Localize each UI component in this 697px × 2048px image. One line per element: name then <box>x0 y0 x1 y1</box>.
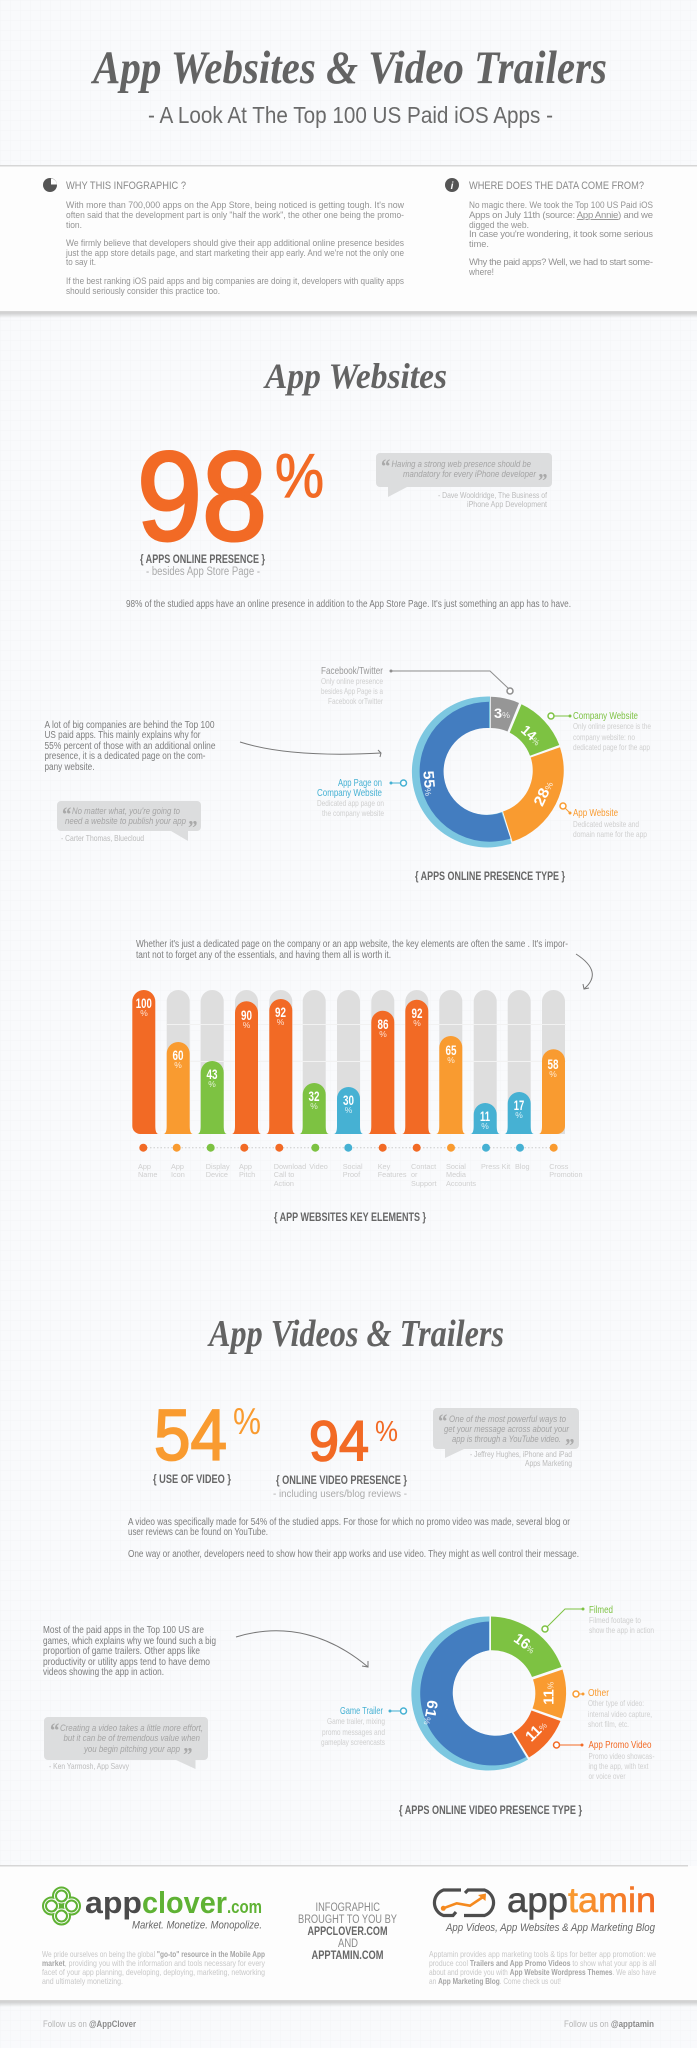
donut chart: online presence type: 55 % <box>419 770 438 797</box>
bar chart: app websites key elements <box>132 990 566 1134</box>
logo: appclover: clover <box>142 1885 227 1920</box>
bar axis labels: Pitch <box>239 1170 255 1179</box>
bar: Key Features 86%: % <box>379 1029 387 1039</box>
bar: Contact or Support 92% <box>402 1000 432 1134</box>
big stat: 98%: 98 <box>137 426 267 567</box>
quote: Ken Yarmosh: ” <box>182 1744 192 1766</box>
text block: games: games, which explains why we found such a big <box>43 1636 216 1647</box>
text block: why this infographic: With more than 700,000 apps on the App Store, being noticed is getting tough. It's now <box>66 200 404 211</box>
text block: games: Most of the paid apps in the Top 100 US are <box>43 1625 204 1636</box>
text block: video summary <box>128 1517 579 1560</box>
bar: Press Kit 11% <box>470 1103 500 1134</box>
callout: Filmed: Filmed <box>589 1604 613 1616</box>
logo: apptamin: tamin <box>568 1881 656 1920</box>
logo: apptamin: App Videos, App Websites & App Marketing Blog <box>445 1922 656 1934</box>
follow: AppClover: Follow us on @AppClover <box>43 2019 136 2030</box>
arrow: to bars <box>576 954 592 989</box>
callout: Game Trailer: promo messages and <box>322 1727 385 1737</box>
big stat: 54%: % <box>233 1401 261 1442</box>
callout: Other: short film, etc. <box>588 1719 629 1729</box>
icon: info: i <box>451 181 454 192</box>
quote: Jeffrey Hughes: “ <box>437 1411 447 1433</box>
bar axis labels: App <box>138 1162 151 1171</box>
bar: App Pitch 90%: % <box>243 1020 251 1030</box>
callout: App Promo Video <box>554 1739 655 1781</box>
big stat: 54%: 54 <box>154 1396 227 1476</box>
bar axis labels: Social <box>343 1162 363 1171</box>
bar axis labels: Download <box>274 1162 306 1171</box>
text block: appclover description: market, providing you with the information and tools necessary for every <box>42 1958 266 1968</box>
text block: games <box>43 1625 216 1678</box>
caption: online video presence: { ONLINE VIDEO PRESENCE } <box>276 1475 407 1487</box>
callout: App Promo Video: App Promo Video <box>588 1739 652 1751</box>
bar: Display Device 43%: % <box>208 1079 216 1089</box>
donut chart: video presence type <box>411 1616 566 1770</box>
text block: key elements: Whether it's just a dedicated page on the company or an app website, the key elements are often the same . It's impor- <box>136 939 568 950</box>
quote: Ken Yarmosh: but it can be of tremendous value when <box>64 1733 200 1744</box>
follow: apptamin: Follow us on @apptamin <box>564 2019 654 2030</box>
bar: Blog 17%: 17 <box>514 1098 524 1113</box>
quote: Ken Yarmosh: Creating a video takes a little more effort, <box>60 1723 203 1734</box>
quote: Jeffrey Hughes: app is through a YouTube video. <box>452 1434 561 1445</box>
text block: data source: Apps on July 11th (source: App Annie) and we <box>469 210 653 221</box>
text block: games: productivity or utility apps tend to have demo <box>43 1657 210 1668</box>
text block: big companies: 55% percent of those with an additional online <box>44 741 216 752</box>
quote: Jeffrey Hughes <box>433 1408 579 1468</box>
bar axis labels: Press Kit <box>481 1162 510 1171</box>
bar axis labels: Accounts <box>446 1179 476 1188</box>
callout: Company Website: Company Website <box>573 710 638 722</box>
text block: data source <box>468 200 653 278</box>
heading: why this infographic: WHY THIS INFOGRAPHIC ? <box>66 180 186 192</box>
bar: Display Device 43% <box>197 1061 227 1134</box>
panel: footer <box>0 1865 697 2007</box>
text block: appclover description <box>42 1949 266 1986</box>
caption: video presence type: { APPS ONLINE VIDEO PRESENCE TYPE } <box>399 1805 582 1817</box>
bar: Cross Promotion 58% <box>538 1049 565 1134</box>
bar axis labels: Device <box>206 1170 228 1179</box>
bar: Press Kit 11%: 11 <box>480 1109 490 1124</box>
callout: Facebook/Twitter: Facebook orTwitter <box>328 696 383 706</box>
bar: Cross Promotion 58%: 58 <box>548 1057 559 1072</box>
bar axis labels: Display <box>206 1162 230 1171</box>
bar axis labels: Promotion <box>549 1170 583 1179</box>
callout: App Promo Video: ing the app, with text <box>588 1761 649 1771</box>
bar: Video 32%: 32 <box>308 1089 320 1104</box>
bar: Download Call to Action 92%: 92 <box>275 1005 286 1020</box>
text block: video summary: One way or another, developers need to show how their app works and use video. They might as well control their message. <box>128 1549 579 1560</box>
text block: data source: time. <box>469 239 489 250</box>
text block: why this infographic: often said that the development part is only "half the work", the other one being the promo- <box>66 210 404 221</box>
big stat: 94%: % <box>375 1416 398 1448</box>
callout: App Website <box>560 803 647 839</box>
callout: Filmed <box>542 1604 654 1635</box>
callout: Company Website <box>548 710 651 752</box>
text block: games: proportion of game trailers. Other apps like <box>43 1646 200 1657</box>
bar: Display Device 43%: 43 <box>206 1067 218 1082</box>
bar: App Pitch 90% <box>232 1001 262 1134</box>
bar: Blog 17% <box>504 1092 534 1134</box>
bar axis labels: or <box>411 1170 418 1179</box>
callout: Game Trailer: Game Trailer <box>340 1705 383 1717</box>
quote: Carter Thomas: - Carter Thomas, Bluecloud <box>61 833 144 843</box>
text block: why this infographic: We firmly believe that developers should give their app additional online presence besides <box>66 238 404 249</box>
bar: Download Call to Action 92%: % <box>277 1017 285 1027</box>
bar: App Icon 60% <box>163 1042 193 1134</box>
quote: Carter Thomas <box>57 801 201 843</box>
donut chart: video presence type: 11% <box>540 1681 557 1705</box>
arrow: to donut <box>240 742 381 757</box>
quote: Carter Thomas: No matter what, you're going to <box>72 806 180 817</box>
text block: why this infographic: to say it. <box>66 257 96 268</box>
callout: Filmed: Filmed footage to <box>589 1615 641 1625</box>
callout: Company Website: dedicated page for the app <box>573 742 650 752</box>
bar: App Icon 60%: % <box>174 1060 182 1070</box>
text block: appclover description: and ultimately monetizing. <box>42 1976 123 1986</box>
donut chart: video presence type: 16% <box>510 1630 539 1658</box>
bar axis labels: Icon <box>171 1170 185 1179</box>
caption: presence type: { APPS ONLINE PRESENCE TYPE } <box>415 871 565 883</box>
quote: Ken Yarmosh: “ <box>49 1720 59 1742</box>
bar axis labels: Social <box>446 1162 466 1171</box>
panel: intro <box>0 165 697 318</box>
callout: Other: Other type of video: <box>588 1698 644 1708</box>
callout: Filmed: show the app in action <box>589 1625 654 1635</box>
callout: Other <box>573 1687 652 1729</box>
quote: Carter Thomas: “ <box>61 804 71 826</box>
text block: why this infographic: tion. <box>66 220 82 231</box>
quote: Jeffrey Hughes: ” <box>564 1435 574 1457</box>
bar axis dots <box>139 1144 558 1152</box>
callout: App Website: App Website <box>573 807 618 819</box>
text block: appclover description: facet of your app planning, developing, deploying, marketing, networking <box>42 1967 265 1977</box>
callout: App Page on Company Website: Dedicated app page on <box>317 798 384 808</box>
callout: Company Website: company website: no <box>573 732 635 742</box>
bar axis labels: Video <box>309 1162 328 1171</box>
text block: big companies <box>44 720 216 773</box>
text block: brought to you by: INFOGRAPHIC <box>316 1902 380 1914</box>
callout: Other: internal video capture, <box>588 1709 652 1719</box>
text block: big companies: presence, it is a dedicated page on the com- <box>44 751 206 762</box>
bar axis labels: Key <box>378 1162 391 1171</box>
logo: appclover <box>44 1885 262 1932</box>
quote: Jeffrey Hughes: get your message across about your <box>444 1424 570 1435</box>
text block: data source: Why the paid apps? Well, we had to start some- <box>469 257 653 268</box>
donut chart: online presence type: 28% <box>531 778 557 809</box>
big stat: 98%: % <box>275 442 324 511</box>
bar: App Name 100%: % <box>140 1008 148 1018</box>
icon: info <box>445 178 459 192</box>
bar axis labels: Contact <box>411 1162 436 1171</box>
quote: Carter Thomas: ” <box>187 817 197 839</box>
callout: Facebook/Twitter: Facebook/Twitter <box>321 665 383 677</box>
text block: data source: In case you're wondering, it took some serious <box>469 229 653 240</box>
bar: Social Media Accounts 65%: 65 <box>446 1043 457 1058</box>
big stat: 94%: 94 <box>309 1410 369 1474</box>
sub caption: - besides App Store Page - <box>146 566 260 578</box>
text block: brought to you by: APPTAMIN.COM <box>312 1950 384 1962</box>
bar: App Pitch 90%: 90 <box>241 1008 252 1023</box>
logo: apptamin: app <box>507 1881 568 1920</box>
bar: Video 32%: % <box>310 1101 318 1111</box>
callout: App Promo Video: Promo video showcas- <box>588 1751 655 1761</box>
bar: Download Call to Action 92% <box>266 999 296 1134</box>
text block: why this infographic: If the best ranking iOS paid apps and big companies are doing it, developers with quality apps <box>66 276 404 287</box>
callout: App Page on Company Website: the company website <box>322 808 384 818</box>
bar axis labels <box>138 1162 583 1188</box>
text block: apptamin description: an App Marketing Blog. Come check us out! <box>429 1976 561 1986</box>
callout: Game Trailer: gameplay screencasts <box>321 1737 385 1747</box>
title: App Websites & Video Trailers <box>90 42 607 94</box>
text block: video summary: A video was specifically made for 54% of the studied apps. For those for which no promo video was made, several blog or <box>128 1517 571 1528</box>
text block: apptamin description: about and provide you with App Website Wordpress Themes. We also have <box>429 1967 656 1977</box>
callout: Facebook/Twitter: Only online presence <box>321 676 383 686</box>
bar: Blog 17%: % <box>515 1110 523 1120</box>
bar: Social Media Accounts 65% <box>436 1036 466 1134</box>
bar axis labels: Blog <box>515 1162 530 1171</box>
callout: Facebook/Twitter: besides App Page is a <box>321 686 383 696</box>
text block: video summary: user reviews can be found on YouTube. <box>128 1527 268 1538</box>
bar: Social Proof 30% <box>334 1087 364 1134</box>
quote: Dave Wooldridge: ” <box>537 470 547 492</box>
quote: Dave Wooldridge: Having a strong web presence should be <box>392 459 531 470</box>
quote: Jeffrey Hughes: One of the most powerful ways to <box>449 1414 566 1425</box>
bar axis labels: Name <box>138 1170 157 1179</box>
bar tracks <box>167 990 565 1134</box>
bar: Social Proof 30%: 30 <box>343 1093 354 1108</box>
heading: app videos and trailers: App Videos & Trailers <box>207 1313 504 1355</box>
icon: clover knot <box>44 1889 78 1923</box>
text block: big companies: US paid apps. This mainly explains why for <box>44 730 201 741</box>
quote: Ken Yarmosh: you begin pitching your app <box>83 1744 180 1755</box>
quote: Ken Yarmosh <box>44 1717 208 1771</box>
text block: why this infographic <box>65 200 404 297</box>
donut chart: online presence type: 3% <box>494 705 510 721</box>
text block: key elements: tant not to forget any of the essentials, and having them all is worth it. <box>136 950 391 961</box>
bar axis labels: Support <box>411 1179 437 1188</box>
quote: Dave Wooldridge: iPhone App Development <box>467 499 548 509</box>
caption: use of video: { USE OF VIDEO } <box>153 1474 231 1486</box>
bar: App Name 100% <box>132 990 159 1134</box>
text block: apptamin description: produce cool Trailers and App Promo Videos to show what your app is all <box>429 1958 656 1968</box>
callout: App Promo Video: or voice over <box>588 1771 626 1781</box>
callout: App Website: Dedicated website and <box>573 819 639 829</box>
text block: big companies: pany website. <box>44 762 94 773</box>
text block: brought to you by <box>298 1902 397 1962</box>
bar: Press Kit 11%: % <box>481 1121 489 1131</box>
text block: appclover description: We pride ourselves on being the global "go-to" resource in the Mobile App <box>42 1949 265 1959</box>
bar: Contact or Support 92%: 92 <box>412 1006 422 1021</box>
heading: app websites: App Websites <box>263 356 447 396</box>
text block: big companies: A lot of big companies are behind the Top 100 <box>44 720 215 731</box>
bar: App Icon 60%: 60 <box>172 1048 184 1063</box>
bar: Video 32% <box>299 1083 329 1134</box>
quote: Jeffrey Hughes: - Jeffrey Hughes, iPhone and iPad <box>470 1449 572 1459</box>
bar: Key Features 86%: 86 <box>378 1017 389 1032</box>
bar: Key Features 86% <box>368 1011 398 1134</box>
quote: Dave Wooldridge: mandatory for every iPhone developer <box>403 469 537 480</box>
bar axis labels: Proof <box>343 1170 361 1179</box>
callout: Other: Other <box>588 1687 609 1699</box>
text block: brought to you by: AND <box>338 1938 358 1950</box>
icon: film chart <box>434 1890 494 1916</box>
text block: data source: where! <box>468 267 494 278</box>
quote: Jeffrey Hughes: Apps Marketing <box>525 1458 572 1468</box>
arrow: to video donut <box>236 1631 368 1667</box>
text block: why this infographic: should seriously consider this practice too. <box>66 286 220 297</box>
callout: Game Trailer: Game trailer, mixing <box>327 1716 385 1726</box>
caption: apps online presence: { APPS ONLINE PRESENCE } <box>140 554 265 566</box>
bar: Cross Promotion 58%: % <box>549 1069 557 1079</box>
donut chart: online presence type: 14% <box>518 722 546 749</box>
callout: Company Website: Only online presence is the <box>573 721 651 731</box>
bar: Contact or Support 92%: % <box>413 1018 421 1028</box>
text block: 98% summary: 98% of the studied apps have an online presence in addition to the App Store Page. It's just something an app has to have. <box>126 599 571 610</box>
text block: key elements <box>136 939 568 961</box>
heading: data source: WHERE DOES THE DATA COME FROM? <box>469 180 644 192</box>
logo: appclover: app <box>85 1885 142 1920</box>
bar axis labels: App <box>171 1162 184 1171</box>
callout: Game Trailer <box>321 1705 406 1747</box>
callout: App Page on Company Website <box>317 777 406 818</box>
text block: brought to you by: BROUGHT TO YOU BY <box>298 1914 397 1926</box>
text block: games: videos showing the app in action. <box>43 1667 164 1678</box>
text block: apptamin description <box>429 1949 656 1986</box>
text block: data source: digged the web. <box>469 220 529 231</box>
bar axis labels: Features <box>378 1170 407 1179</box>
bar axis labels: Media <box>446 1170 467 1179</box>
quote: Dave Wooldridge <box>376 453 552 509</box>
bar: App Name 100%: 100 <box>136 996 152 1011</box>
bar axis labels: Call to <box>274 1170 294 1179</box>
logo: apptamin <box>434 1881 656 1934</box>
icon: pie chart <box>43 178 57 192</box>
logo: appclover: Market. Monetize. Monopolize. <box>132 1920 262 1932</box>
caption: key elements: { APP WEBSITES KEY ELEMENTS } <box>274 1212 426 1224</box>
bar: Social Media Accounts 65%: % <box>447 1055 455 1065</box>
sub caption: - including users/blog reviews - <box>273 1488 407 1500</box>
quote: Dave Wooldridge: “ <box>380 456 390 478</box>
text block: why this infographic: just the app store details page, and start marketing their app early. And we're not the only one <box>65 248 404 259</box>
text block: brought to you by: APPCLOVER.COM <box>308 1926 388 1938</box>
quote: Dave Wooldridge: - Dave Wooldridge, The Business of <box>438 490 548 500</box>
bar axis labels: Action <box>274 1179 294 1188</box>
logo: appclover: .com <box>227 1897 262 1917</box>
text block: data source: No magic there. We took the Top 100 US Paid iOS <box>469 200 653 211</box>
callout: App Website: domain name for the app <box>573 829 647 839</box>
bar axis labels: App <box>239 1162 252 1171</box>
donut chart: online presence type <box>412 696 564 847</box>
bar: Social Proof 30%: % <box>345 1105 353 1115</box>
donut chart: video presence type: 61% <box>420 1699 441 1727</box>
quote: Carter Thomas: need a website to publish your app <box>65 816 186 827</box>
donut chart: video presence type: 11% <box>522 1717 551 1745</box>
bar axis labels: Cross <box>549 1162 569 1171</box>
quote: Ken Yarmosh: - Ken Yarmosh, App Savvy <box>49 1761 130 1771</box>
callout: App Page on Company Website: Company Website <box>317 787 382 799</box>
callout: App Page on Company Website: App Page on <box>338 777 382 789</box>
subtitle: - A Look At The Top 100 US Paid iOS Apps - <box>148 102 553 128</box>
callout: Facebook/Twitter <box>321 665 513 706</box>
